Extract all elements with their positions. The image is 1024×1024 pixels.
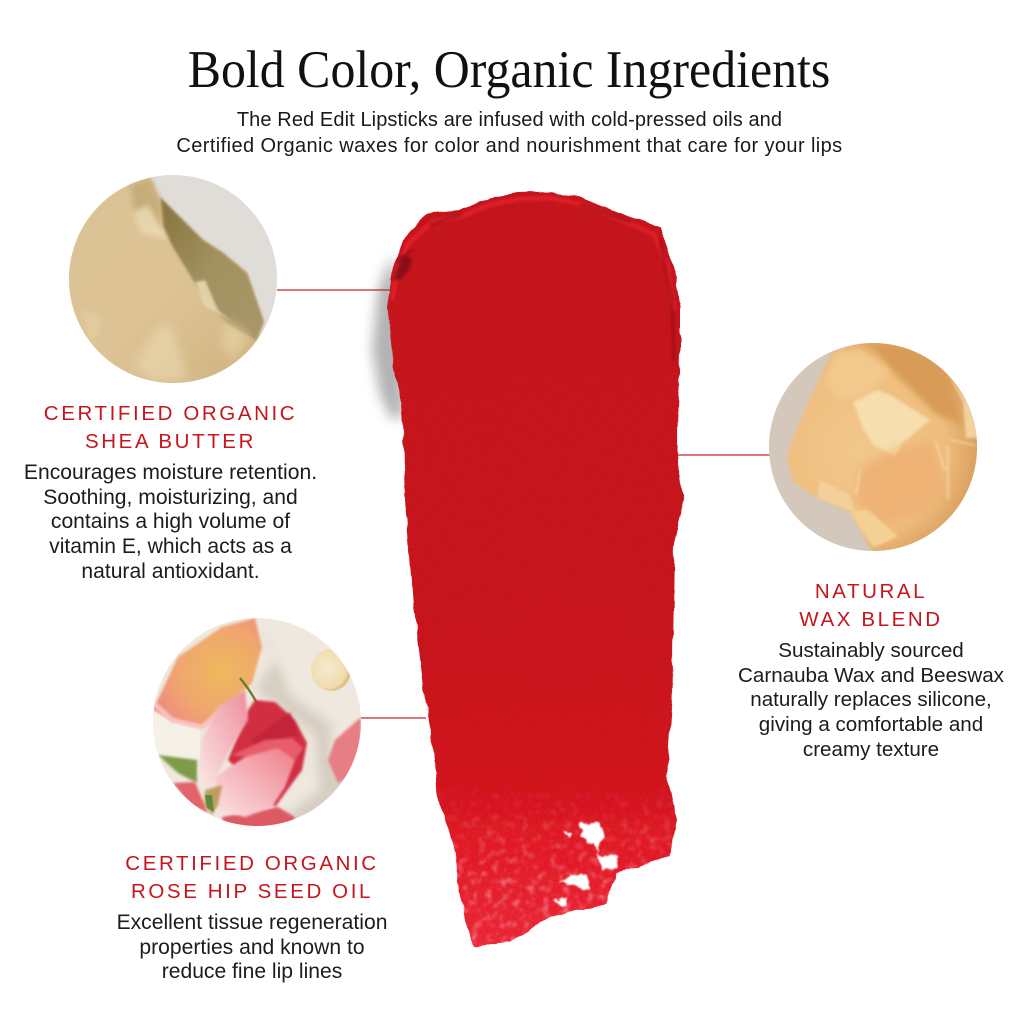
photo: rose and petals bbox=[150, 618, 361, 835]
text block: rose hip seed oil bbox=[117, 852, 387, 983]
description: shea butter bbox=[24, 461, 317, 583]
artwork: swatch, ingredient photos and connector lines bbox=[69, 175, 977, 948]
description: shea butter: Soothing, moisturizing, and bbox=[43, 486, 298, 509]
description: rose hip seed oil: Excellent tissue regeneration bbox=[117, 911, 387, 934]
description: wax blend: naturally replaces silicone, bbox=[750, 688, 992, 711]
heading: shea butter: CERTIFIED ORGANIC bbox=[44, 402, 297, 425]
description: wax blend: creamy texture bbox=[803, 738, 939, 761]
photo: wax blend bbox=[769, 340, 985, 555]
lipstick swatch bbox=[372, 185, 700, 960]
description: shea butter: Encourages moisture retention. bbox=[24, 461, 317, 484]
connector: shea butter bbox=[277, 289, 410, 291]
description: rose hip seed oil: reduce fine lip lines bbox=[162, 960, 342, 983]
heading: shea butter: SHEA BUTTER bbox=[85, 430, 256, 452]
connector: rose hip bbox=[361, 717, 426, 719]
description: rose hip seed oil bbox=[117, 911, 387, 983]
heading: shea butter bbox=[44, 402, 297, 452]
intro text bbox=[176, 109, 843, 157]
text block: wax blend bbox=[738, 580, 1004, 761]
description: shea butter: contains a high volume of bbox=[51, 510, 290, 533]
heading: rose hip seed oil: ROSE HIP SEED OIL bbox=[131, 880, 373, 902]
heading: rose hip seed oil bbox=[125, 852, 379, 902]
white gaps in the swatch bbox=[553, 822, 618, 904]
description: rose hip seed oil: properties and known to bbox=[139, 936, 365, 959]
description: shea butter: natural antioxidant. bbox=[81, 560, 260, 583]
intro text: Certified Organic waxes for color and nourishment that care for your lips bbox=[176, 135, 843, 157]
connector: wax blend bbox=[678, 454, 770, 456]
heading: wax blend: NATURAL bbox=[815, 580, 927, 603]
description: wax blend bbox=[738, 639, 1004, 761]
description: wax blend: giving a comfortable and bbox=[759, 713, 983, 736]
text block: shea butter bbox=[24, 402, 317, 583]
description: wax blend: Sustainably sourced bbox=[778, 639, 964, 662]
heading: wax blend bbox=[799, 580, 943, 630]
heading: rose hip seed oil: CERTIFIED ORGANIC bbox=[125, 852, 379, 875]
photo: shea butter bbox=[60, 175, 277, 390]
title: Bold Color, Organic Ingredients bbox=[188, 41, 830, 99]
description: wax blend: Carnauba Wax and Beeswax bbox=[738, 664, 1004, 687]
description: shea butter: vitamin E, which acts as a bbox=[49, 535, 292, 558]
heading: wax blend: WAX BLEND bbox=[799, 608, 943, 630]
drop of oil bbox=[311, 649, 351, 691]
intro text: The Red Edit Lipsticks are infused with cold-pressed oils and bbox=[237, 109, 782, 131]
